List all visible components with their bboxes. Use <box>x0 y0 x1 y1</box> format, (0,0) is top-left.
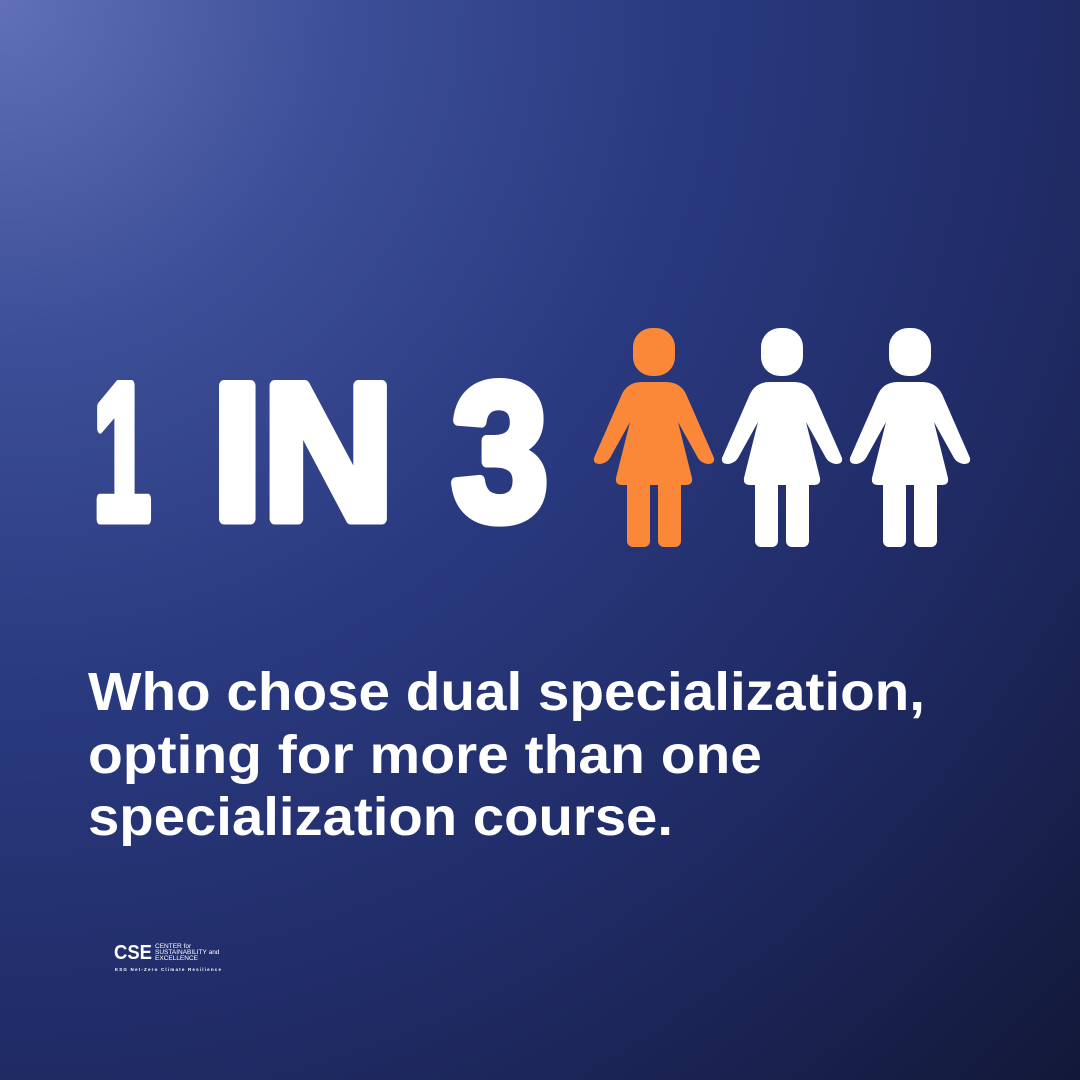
logo: CSE: CENTER for <box>155 943 192 950</box>
logo: CSE: CSE <box>114 942 152 964</box>
icon: white woman figure 2 <box>722 328 842 547</box>
icon: orange woman figure <box>594 328 714 547</box>
headline: 1 IN 3: IN <box>212 344 394 561</box>
logo: CSE <box>114 942 221 972</box>
description text: specialization course. <box>88 787 673 847</box>
description text <box>88 662 925 847</box>
icon: white woman figure 3 <box>850 328 970 547</box>
description text: opting for more than one <box>88 725 762 785</box>
logo: CSE: EXCELLENCE <box>155 955 199 962</box>
headline: 1 IN 3: 3 <box>452 344 548 561</box>
logo: CSE: ESG Net-Zero Climate Resilience <box>115 967 221 972</box>
headline: 1 IN 3 <box>93 344 548 561</box>
logo: CSE: SUSTAINABILITY and <box>155 949 220 956</box>
headline: 1 IN 3: 1 <box>93 344 151 561</box>
description text: Who chose dual specialization, <box>88 662 925 722</box>
